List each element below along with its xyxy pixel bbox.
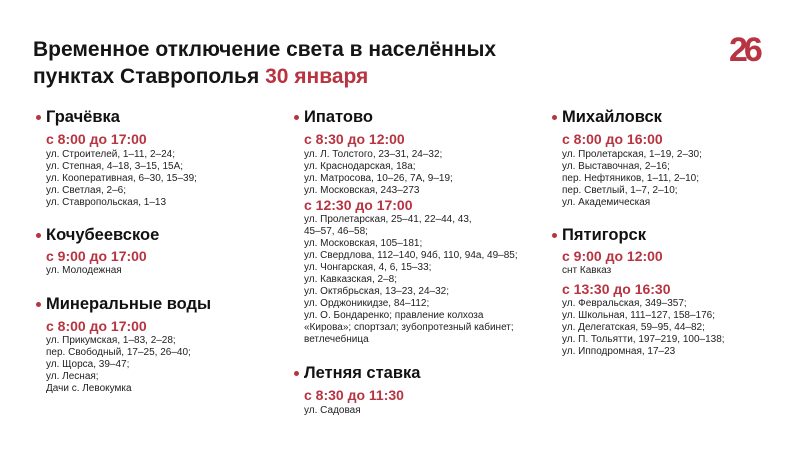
panel: Ипатово: ул. Московская, 243–273	[304, 185, 419, 196]
panel: Ипатово: ул. Кавказская, 2–8;	[304, 274, 397, 285]
panel: Грачёвка	[36, 108, 197, 208]
panel: Минеральные воды: Дачи с. Левокумка	[46, 383, 132, 394]
panel: Ипатово	[294, 108, 518, 345]
panel: Пятигорск: ул. Делегатская, 59–95, 44–82;	[562, 322, 705, 333]
panel: Пятигорск: ул. П. Тольятти, 197–219, 100–138;	[562, 334, 725, 345]
panel: Михайловск: пер. Светлый, 1–7, 2–10;	[562, 185, 678, 196]
panel: Грачёвка: с 8:00 до 17:00	[46, 131, 147, 147]
panel: Пятигорск: снт Кавказ	[562, 265, 611, 276]
panel: Ипатово: ул. Л. Толстого, 23–31, 24–32;	[304, 149, 442, 160]
panel: Пятигорск: ул. Школьная, 111–127, 158–176;	[562, 310, 715, 321]
panel: Ипатово: ул. Пролетарская, 25–41, 22–44, 43,	[304, 214, 472, 225]
panel: Пятигорск: Пятигорск	[562, 226, 646, 244]
panel: Ипатово: 45–57, 46–58;	[304, 226, 368, 237]
panel: Минеральные воды: с 8:00 до 17:00	[46, 318, 147, 334]
panel: Михайловск: пер. Нефтяников, 1–11, 2–10;	[562, 173, 699, 184]
panel: Кочубеевское: с 9:00 до 17:00	[46, 248, 147, 264]
panel: Грачёвка: ул. Степная, 4–18, 3–15, 15А;	[46, 161, 183, 172]
panel: Пятигорск: ул. Ипподромная, 17–23	[562, 346, 675, 357]
panel: Минеральные воды: пер. Свободный, 17–25, 26–40;	[46, 347, 191, 358]
panel: Летняя ставка: ул. Садовая	[304, 405, 361, 416]
panel: Пятигорск	[552, 226, 725, 357]
title: пунктах Ставрополья 30 января	[33, 65, 368, 88]
panel: Ипатово: «Кирова»; спортзал; зубопротезный кабинет;	[304, 322, 514, 333]
panel: Михайловск: Михайловск	[562, 108, 662, 126]
panel: Михайловск	[552, 108, 702, 208]
panel: Михайловск: ул. Выставочная, 2–16;	[562, 161, 670, 172]
panel: Грачёвка: ул. Строителей, 1–11, 2–24;	[46, 149, 175, 160]
panel: Ипатово: ул. Чонгарская, 4, 6, 15–33;	[304, 262, 431, 273]
panel: Грачёвка: ул. Кооперативная, 6–30, 15–39;	[46, 173, 197, 184]
panel: Грачёвка: ул. Светлая, 2–6;	[46, 185, 126, 196]
panel: Ипатово: с 12:30 до 17:00	[304, 197, 413, 213]
panel: Грачёвка: ул. Ставропольская, 1–13	[46, 197, 166, 208]
panel: Ипатово: ул. Орджоникидзе, 84–112;	[304, 298, 429, 309]
panel: Ипатово: ул. Краснодарская, 18а;	[304, 161, 416, 172]
panel: Минеральные воды	[36, 295, 211, 394]
panel: Летняя ставка: Летняя ставка	[304, 364, 420, 382]
panel: Минеральные воды: ул. Щорса, 39–47;	[46, 359, 129, 370]
panel: Пятигорск: ул. Февральская, 349–357;	[562, 298, 687, 309]
panel: Кочубеевское: ул. Молодежная	[46, 265, 122, 276]
panel: Летняя ставка: с 8:30 до 11:30	[304, 387, 404, 403]
title: Временное отключение света в населённых	[33, 38, 496, 61]
panel: Михайловск: с 8:00 до 16:00	[562, 131, 663, 147]
panel: Ипатово: ул. О. Бондаренко; правление колхоза	[304, 310, 483, 321]
panel: Кочубеевское: Кочубеевское	[46, 226, 159, 244]
panel: Кочубеевское	[36, 226, 159, 276]
panel: Минеральные воды: ул. Прикумская, 1–83, 2–28;	[46, 335, 176, 346]
panel: Ипатово: ул. Свердлова, 112–140, 94б, 110, 94а, 49–85;	[304, 250, 518, 261]
panel: Ипатово: ул. Московская, 105–181;	[304, 238, 422, 249]
title	[33, 38, 496, 88]
panel: Ипатово: ул. Матросова, 10–26, 7А, 9–19;	[304, 173, 453, 184]
panel: Ипатово: Ипатово	[304, 108, 373, 126]
panel: Пятигорск: с 13:30 до 16:30	[562, 281, 671, 297]
panel: Грачёвка: Грачёвка	[46, 108, 120, 126]
logo: 26: 26	[729, 31, 759, 69]
panel: Минеральные воды: Минеральные воды	[46, 295, 211, 313]
panel: Минеральные воды: ул. Лесная;	[46, 371, 99, 382]
panel: Михайловск: ул. Академическая	[562, 197, 650, 208]
panel: Ипатово: с 8:30 до 12:00	[304, 131, 405, 147]
panel: Михайловск: ул. Пролетарская, 1–19, 2–30;	[562, 149, 702, 160]
panel: Пятигорск: с 9:00 до 12:00	[562, 248, 663, 264]
panel: Летняя ставка	[294, 364, 421, 416]
panel: Ипатово: ул. Октябрьская, 13–23, 24–32;	[304, 286, 449, 297]
panel: Ипатово: ветлечебница	[304, 334, 369, 345]
